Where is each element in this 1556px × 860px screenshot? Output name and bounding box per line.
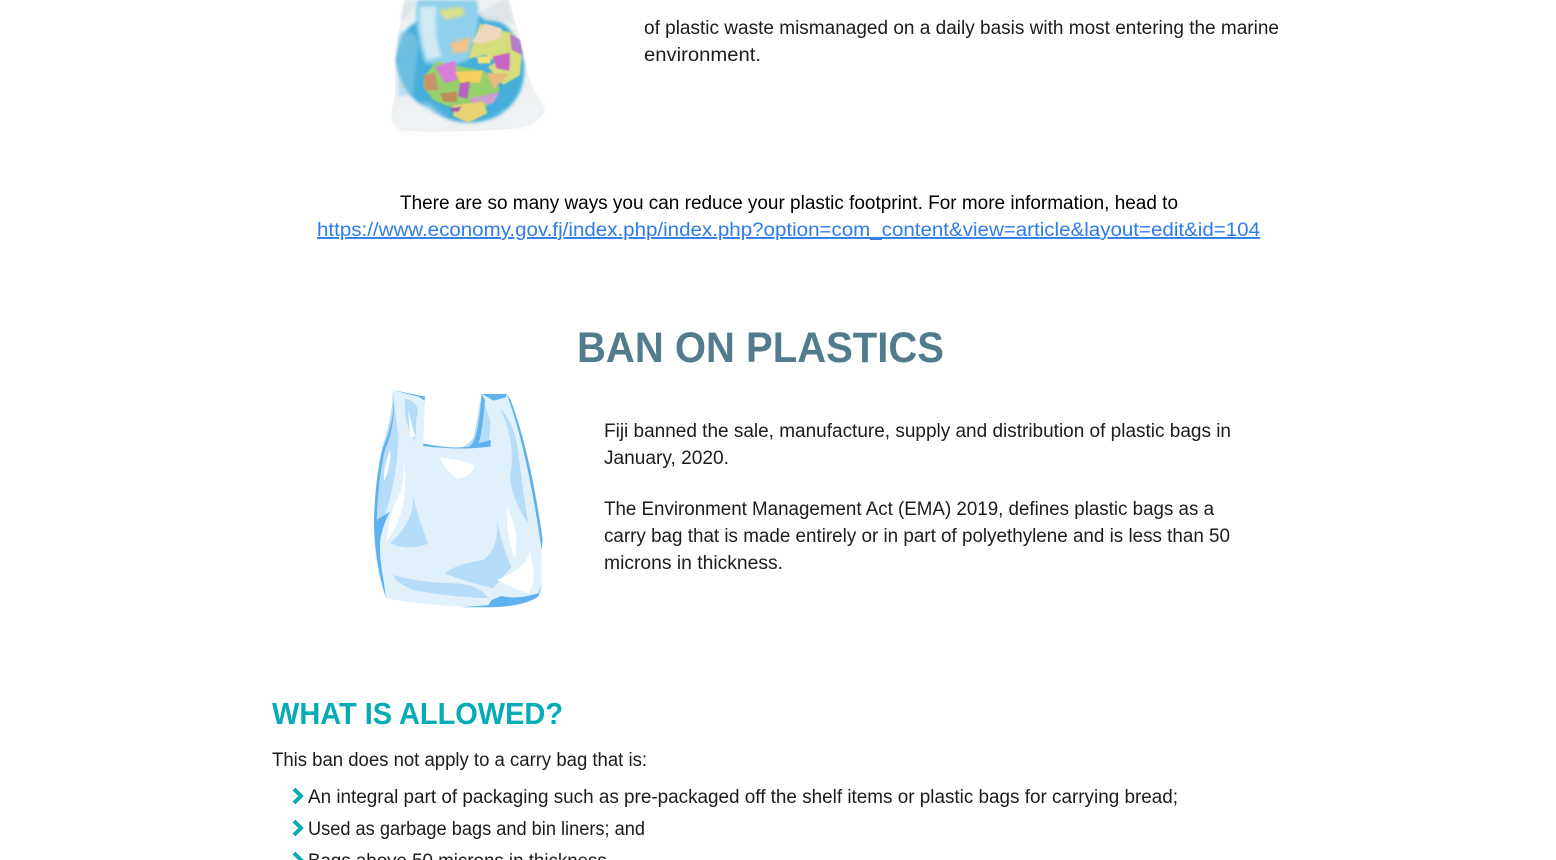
call to action with link [317, 193, 1260, 241]
intro text continuation: of plastic waste mismanaged on a daily basis with most entering the marine [644, 18, 1279, 39]
call to action with link: https://www.economy.gov.fj/index.php/index.php?option=com_content&view=article&layout=edit&id=104 [317, 220, 1260, 241]
text block: ban details: The Environment Management Act (EMA) 2019, defines plastic bags as a [604, 499, 1214, 520]
image: plastic bag illustration [374, 390, 543, 607]
intro text continuation: environment. [644, 45, 761, 66]
text block: ban details: Fiji banned the sale, manufacture, supply and distribution of plastic bags in [604, 421, 1231, 442]
intro sentence for list: This ban does not apply to a carry bag that is: [272, 750, 647, 771]
list item 2: Used as garbage bags and bin liners; and [308, 819, 645, 840]
list: allowed bags [294, 787, 1178, 860]
text block: ban details: carry bag that is made entirely or in part of polyethylene and is less than 50 [604, 526, 1230, 547]
list item 1: An integral part of packaging such as pre-packaged off the shelf items or plastic bags for carrying bread; [308, 787, 1178, 808]
heading: ban on plastics: BAN ON PLASTICS [577, 324, 944, 372]
intro text continuation [644, 18, 1279, 66]
text block: ban details [604, 421, 1231, 574]
text block: ban details: microns in thickness. [604, 553, 783, 574]
heading: what is allowed: WHAT IS ALLOWED? [272, 696, 563, 731]
text block: ban details: January, 2020. [604, 448, 729, 469]
image: globe in a plastic bag [392, 0, 545, 132]
call to action with link: There are so many ways you can reduce your plastic footprint. For more information, head to [400, 193, 1178, 214]
